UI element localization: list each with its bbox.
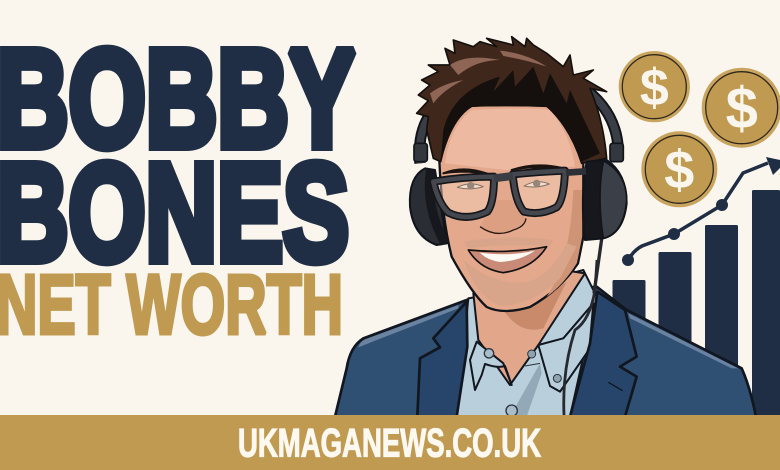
headphone band — [419, 85, 618, 163]
shirt buttons — [484, 349, 494, 358]
website address: UKMAGANEWS.CO.UK — [238, 422, 541, 466]
stubble — [463, 237, 577, 306]
eyebrows — [443, 165, 563, 174]
illustration: torso in blazer and shirt — [335, 270, 756, 417]
collar — [470, 342, 512, 390]
nose — [480, 200, 525, 233]
microphone cable upper — [594, 237, 602, 293]
icon: dollar coins: $ — [664, 140, 694, 200]
footer banner — [0, 415, 780, 470]
shirt — [457, 270, 597, 417]
smile — [468, 247, 547, 273]
glasses — [433, 171, 565, 217]
icon: dollar coins: $ — [726, 76, 758, 141]
jacket — [335, 287, 756, 417]
icon: dollar coins: $ — [640, 59, 669, 117]
illustration: head with headphones and glasses — [410, 37, 627, 311]
microphone cable lower — [564, 260, 597, 415]
title: Bobby Bones — [0, 22, 355, 290]
cheek shadow — [547, 190, 582, 297]
ear cups — [410, 168, 447, 245]
forehead highlight — [445, 109, 575, 170]
title: Bobby Bones: BOBBY — [0, 22, 355, 176]
hair — [417, 37, 607, 163]
subtitle: net worth: NET WORTH — [0, 258, 343, 352]
title: Bobby Bones: BONES — [0, 136, 349, 290]
icon: dollar coins — [619, 51, 780, 207]
lapels — [417, 302, 467, 417]
face — [439, 105, 583, 311]
bar chart with rising trend line — [612, 157, 780, 420]
neck — [473, 270, 585, 385]
eyes — [457, 182, 549, 189]
